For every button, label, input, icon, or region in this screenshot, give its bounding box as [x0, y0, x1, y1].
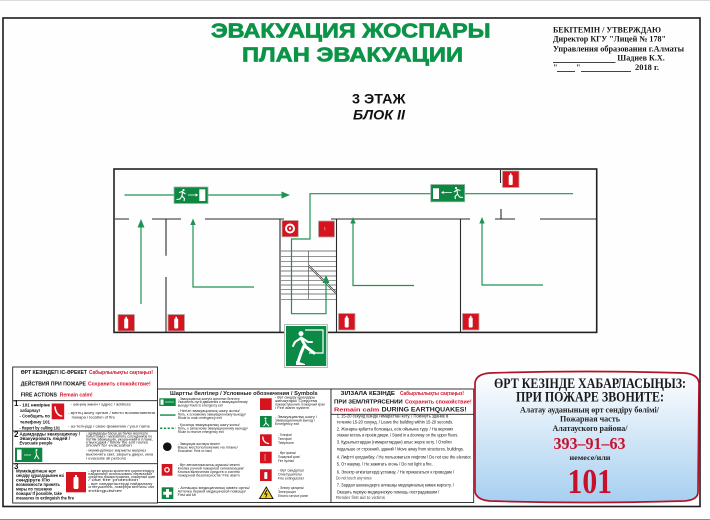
text: earthquake instructions: Оказать первую медицинскую помощь пострадавшим /	[337, 489, 440, 494]
text: evacuation exit: выходу/ Route to emergency exit	[178, 404, 223, 408]
icon: extinguisher 3	[338, 314, 355, 330]
text: telephone: - Телефон/	[278, 433, 292, 437]
phone number: 393–91–63	[554, 434, 626, 453]
step 2 evacuate: путям эвакуации, указанным в плане,	[86, 437, 153, 441]
text: emergency exit: Emergency exit	[275, 422, 299, 426]
outer walls	[114, 169, 597, 332]
text: earthquake instructions: 6. Электр өткізгіштерді ұстамау. / Не прикасаться к проводам /	[337, 469, 455, 474]
text: fire equipment: пожаротушения, пожарный кран	[275, 402, 325, 406]
text: emergency exit: Эвакуационный выход /	[275, 418, 315, 422]
text: earthquake instructions: этажах встать в проём двери. / Stand in a doorway on the upper floors.	[337, 433, 458, 438]
panel: symbols legend	[158, 389, 331, 502]
text: extinguisher: Огнетушитель/	[278, 472, 302, 476]
text: first aid	[178, 486, 250, 497]
text: earthquake instructions: 1. 15-20 секунд ішінде ғимараттан кету. / Покинуть здание в	[337, 414, 449, 419]
step 1 report: пожара / location of fire	[72, 416, 115, 420]
icon: exit sign symbol	[159, 398, 176, 406]
title	[211, 20, 490, 67]
text: fire equipment: жинақтары/ Средства	[275, 399, 317, 403]
icon: fire alarm	[282, 220, 298, 237]
staircase	[281, 251, 336, 300]
step 2 evacuate: выключить свет, закрыть двери, окна	[86, 452, 153, 456]
heading: fire actions: ДЕЙСТВИЯ ПРИ ПОЖАРЕ	[21, 380, 86, 388]
approval block: "	[553, 63, 558, 72]
floor and block subtitle: 3 ЭТАЖ	[352, 90, 406, 106]
text: extinguisher: - Өрт сөндіргіш/	[278, 468, 304, 472]
text: fire equipment	[275, 396, 325, 410]
icon: red square symbol	[260, 398, 272, 410]
text: main route: - Негізгі эвакуациялық шығу жолы/	[178, 409, 240, 413]
text: earthquake instructions: 5. От жақпау. / Не зажигать огонь / Do not light a fire.	[337, 461, 433, 466]
step 3 extinguish: / use fire protection	[88, 478, 138, 482]
heading: earthquake: Сабырлылықты сақтаңыз!	[400, 390, 464, 397]
text: hydrant: Fire hydrant	[278, 459, 294, 463]
text: reserve route: Путь, к запасному эвакуационному выходу/	[178, 426, 248, 430]
heading: earthquake	[334, 390, 472, 414]
text: telephone	[278, 433, 294, 445]
text: fire alarm: Кнопка ручной пожарной сигнализации/	[178, 466, 244, 470]
heading: earthquake: ЗІЛЗАЛА КЕЗІНДЕ	[341, 391, 395, 397]
text: first aid: First aid kit	[178, 493, 196, 497]
heading: fire actions	[21, 369, 153, 399]
text: fire equipment: / Fire alarm system	[275, 406, 309, 410]
step 1 report: - Сообщить по	[20, 412, 50, 418]
text: fire alarm: - Өрт автоматикасының жұмысы/ мекені	[178, 463, 240, 467]
step 1 report: телефону 101	[20, 418, 50, 424]
step 3 extinguish: Мүмкіндігінше өрт	[16, 469, 57, 474]
icon: assembly point dot	[163, 442, 172, 451]
heading: earthquake: Сохранить спокойствие!	[405, 398, 472, 405]
step 3 extinguish: огнетушитель, повернув вентиль/ use	[88, 485, 154, 489]
step 1 report: - өзіңнің жөнін / адрес / address	[71, 402, 131, 406]
text: main route: Путь, к основному эвакуационному выходу/	[178, 412, 246, 416]
text: assembly point: Ваше местоположение на плане/	[178, 446, 238, 450]
text: assembly point	[178, 442, 238, 453]
text: emergency exit	[275, 415, 317, 426]
step 2 evacuate: - адамдарды басқа да бөлек жерлерге	[86, 431, 148, 435]
panel: fire actions	[13, 367, 158, 503]
icon: extinguisher 4	[462, 314, 479, 330]
text: telephone: Телефон/	[278, 437, 292, 441]
step 1 report	[14, 399, 155, 430]
heading: earthquake: ПРИ ЗЕМЛЯТРЯСЕНИИ	[334, 399, 403, 405]
heading: earthquake: Remain calm	[334, 408, 379, 414]
step 1 report: - өрттің шығу орнын / место возникновения	[68, 411, 155, 415]
step 3 extinguish: - өрт сөндіргіштерді пайдалану	[88, 482, 153, 486]
text: earthquake instructions	[336, 414, 472, 500]
icon: first aid	[162, 487, 173, 499]
emergency number: 101	[568, 462, 612, 501]
step 2 evacuate: shown for evacuation	[86, 443, 132, 447]
text: reserve route: Route to reserve emergency exit	[178, 430, 224, 434]
floor and block subtitle: БЛОК II	[353, 106, 406, 122]
heading: earthquake: DURING EARTHQUAKES!	[382, 407, 467, 414]
icon: fire hose	[318, 221, 334, 237]
heading: call fire service: ПРИ ПОЖАРЕ ЗВОНИТЕ:	[516, 390, 664, 406]
step 2 evacuate: Evacuate people	[20, 440, 53, 445]
text: electric panel: - Электр қалқаны/	[278, 486, 304, 490]
step 3 extinguish: пожара/ If possible, take	[16, 491, 62, 496]
text: earthquake instructions: 2. Жоғарғы қабатта болсаңыз, есік ойығына тұру. / На верхних	[337, 427, 454, 432]
icon: extinguisher 5	[502, 171, 519, 188]
text: hydrant: Пожарный кран/	[278, 455, 300, 459]
step 3 extinguish: средства пожаротушения, пожарный кран	[88, 475, 155, 479]
icon: extinguisher symbol	[260, 469, 272, 481]
floor plan	[114, 169, 597, 332]
text: emergency exit: - Эвакуациялық шығу /	[275, 415, 317, 419]
icon: hose symbol	[260, 452, 272, 463]
text: first aid: Аптечка первой медицинской помощи/	[178, 490, 246, 494]
approval block: Директор КГУ "Лицей № 178"	[553, 35, 666, 44]
icon: main route line	[160, 414, 176, 416]
approval block: БЕКІТЕМІН / УТВЕРЖДАЮ	[553, 25, 661, 34]
heading: symbols: Шартты белгілер / Условные обозначения / Symbols	[170, 390, 318, 397]
title: ЭВАКУАЦИЯ ЖОСПАРЫ	[211, 20, 490, 42]
step 1 report: - Report by calling 101	[20, 425, 60, 430]
step 3 extinguish: measures to extinguish the fire	[16, 496, 74, 500]
step 3 extinguish	[14, 462, 155, 500]
icon: phone symbol	[260, 434, 272, 446]
icon: extinguisher 2	[168, 314, 184, 331]
text: extinguisher	[278, 468, 305, 480]
text: earthquake instructions: течение 15-20 секунд. / Leave the building within 15-20 seconds.	[337, 419, 453, 424]
text: fire department: Алатауского района/	[552, 424, 628, 433]
text: main route	[178, 409, 246, 420]
text: earthquake instructions: 7. Зардап шеккендерге алғашқы медициналық көмек көрсету. /	[337, 483, 455, 488]
step 2 evacuate: - мүмкіндігінше жарықты өшіріңіз	[86, 449, 146, 453]
icon: telephone	[52, 404, 64, 419]
approval block: Шадиев К.Х.	[617, 54, 665, 63]
icon: exit sign	[15, 448, 42, 462]
step 2 evacuate: Адамдарды эвакуациялау /	[20, 431, 81, 436]
step 3 extinguish: extinguisher	[88, 489, 124, 493]
text: assembly point: - Эвакуация жоспары мекені	[178, 442, 220, 446]
text: hydrant	[278, 451, 300, 463]
step 3 extinguish: сөндіру құралдарымен өзі	[16, 473, 64, 478]
step 3 extinguish: 3	[14, 462, 19, 471]
step 3 extinguish: сөндіруге /По	[16, 478, 50, 482]
icon: extinguisher 1	[118, 314, 134, 331]
step 2 evacuate	[14, 430, 153, 462]
text: fire alarm: пожарной безопасности/ Fire alarm	[178, 474, 240, 478]
text: first aid: - Алғашқы медициналық көмек орны/	[178, 486, 250, 490]
step 2 evacuate: к выходам / follow the exit routes	[86, 440, 148, 444]
text: hydrant: - Өрт краны/	[278, 451, 296, 455]
icon: extinguisher	[66, 472, 86, 492]
text: earthquake instructions: подальше от строений, зданий / Move away from structures, buildings.	[337, 447, 464, 452]
inner walls	[115, 170, 596, 332]
panel: emergency phone numbers	[475, 372, 699, 502]
text: earthquake instructions: 3. Құрылыстардан (ғимараттардан) алыс жерге кету. / Отойти	[337, 439, 452, 444]
icon: fire alarm symbol	[162, 464, 172, 476]
approval block: 2018 г.	[635, 63, 659, 72]
text: evacuation exit: - Эвакуациялық шығуға арналған белгілер	[178, 397, 240, 401]
step 2 evacuate: / evacuate all persons	[86, 456, 126, 460]
text: earthquake instructions: Render first aid to victims	[336, 495, 386, 500]
text: fire department: Алатау ауданының өрт сөндіру бөлімі/	[520, 406, 660, 415]
text: evacuation exit	[178, 397, 248, 408]
step 1 report: - 101 нөміріне	[20, 403, 50, 408]
step 1 report: - аз-тегіңізді / свою фамилию / your name	[68, 424, 150, 428]
heading: fire actions: Сабырлылықты сақтаңыз!	[89, 369, 153, 376]
step 2 evacuate: Эвакуировать людей /	[20, 435, 71, 441]
icon: large emergency exit sign	[284, 324, 328, 368]
heading: fire actions: ӨРТ КЕЗІНДЕГІ ІС-ӘРЕКЕТ	[21, 370, 88, 376]
text: extinguisher: Fire extinguisher	[278, 476, 305, 480]
step 1 report: хабарлау!	[20, 407, 40, 413]
exit sign: corridor east	[431, 184, 465, 202]
icon: electrical warning	[260, 487, 273, 499]
step 2 evacuate: 2	[14, 430, 19, 439]
approval block	[553, 25, 685, 72]
text: assembly point: Evacuation: Point on hand	[178, 449, 212, 453]
title: ПЛАН ЭВАКУАЦИИ	[242, 45, 463, 67]
icon: emergency exit symbol	[260, 416, 272, 427]
step 3 extinguish: возможности принять	[16, 482, 60, 487]
heading: fire actions: Сохранить спокойствие!	[88, 381, 151, 388]
text: reserve route: - Қосалқы эвакуациялық шығу жолы/	[178, 423, 240, 427]
text: fire department	[520, 406, 660, 433]
heading: fire actions: FIRE ACTIONS	[21, 393, 57, 399]
evacuation routes	[124, 192, 573, 314]
text: evacuation exit: Указатель пути движения к эвакуационному	[178, 400, 248, 404]
text: electric panel	[278, 486, 308, 498]
step 3 extinguish: - өртке қарсы крантпен қоректендіру	[88, 469, 155, 473]
step 3 extinguish: пайдалану/ использовать первичные	[88, 472, 152, 476]
approval block: "	[576, 63, 581, 72]
text: fire alarm	[178, 463, 244, 478]
text: fire alarm: Кнопка включения средств и систем	[178, 470, 240, 474]
text: telephone: Telephone	[278, 441, 294, 445]
text: fire equipment: - Өрт сөндіру құралдары	[275, 396, 315, 400]
text: main route: Route to main emergency exit	[178, 416, 222, 420]
text: electric panel: Electric service panel	[278, 494, 308, 498]
step 3 extinguish: меры по тушению	[16, 486, 52, 492]
text: reserve route	[178, 423, 248, 434]
panel: earthquake actions	[331, 389, 474, 502]
icon: reserve route line	[160, 427, 176, 429]
text: electric panel: Электрощит	[278, 490, 296, 494]
text: earthquake instructions: Do not touch any wires	[336, 475, 372, 480]
step 2 evacuate: бағыттаңыз / направлять сотрудников по	[86, 434, 152, 438]
exit sign: corridor west	[174, 187, 208, 204]
step 1 report: 1	[14, 399, 19, 408]
heading: fire actions: Remain calm!	[60, 393, 93, 399]
floor and block subtitle	[352, 90, 406, 122]
text: or: немесе/или	[570, 453, 611, 462]
text: earthquake instructions: 4. Лифтті қолданбау. / Не пользоваться лифтом / Do not use the elevator.	[337, 454, 472, 459]
text: fire department: Пожарная часть	[560, 415, 621, 424]
heading: call fire service	[494, 376, 686, 406]
approval block: Управления образования г.Алматы	[553, 45, 685, 54]
